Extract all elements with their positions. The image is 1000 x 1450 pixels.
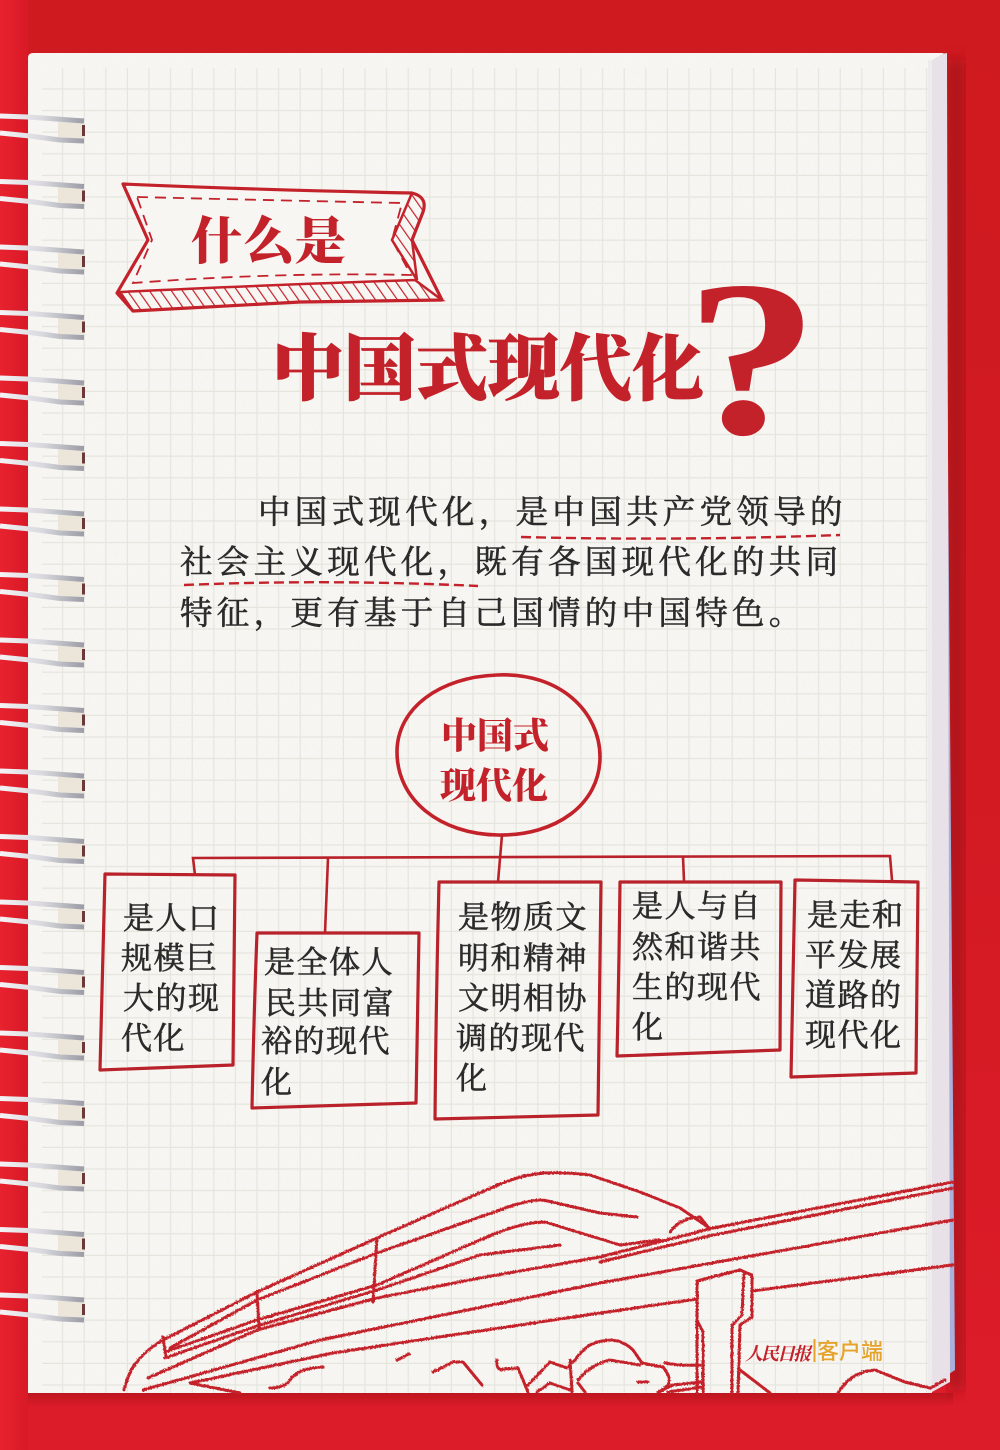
box 1: 大的现	[123, 981, 220, 1016]
box 1: 代化	[121, 1021, 186, 1056]
box 3: 调的现代	[456, 1021, 586, 1056]
box 4: 是人与自	[632, 889, 762, 924]
box 2: 化	[261, 1065, 294, 1100]
box 5: 现代化	[805, 1018, 902, 1053]
box 1: 规模巨	[121, 941, 218, 976]
box 3: 是物质文	[458, 900, 588, 935]
banner: 什么是	[117, 184, 442, 311]
box 2: 民共同富	[265, 986, 395, 1021]
box 5: 平发展	[805, 938, 902, 973]
box 2	[252, 933, 419, 1108]
box 4: 化	[632, 1010, 664, 1045]
box 5: 道路的	[805, 978, 902, 1013]
box 2: 是全体人	[264, 945, 394, 980]
box 4: 生的现代	[632, 970, 762, 1005]
box 4: 然和谐共	[632, 930, 762, 965]
illustration: high-speed train and bridge	[124, 1173, 953, 1393]
logo: 人民日报客户端: 客户端	[817, 1339, 883, 1364]
title: 中国式现代化: 中国式现代化	[272, 330, 704, 410]
box 4	[617, 882, 781, 1056]
banner text: 什么是	[191, 214, 347, 271]
logo: 人民日报客户端: 人民日报	[745, 1344, 813, 1364]
box 3: 化	[456, 1061, 488, 1096]
dashed emphasis underline	[184, 535, 840, 586]
mind map centre oval: 现代化	[440, 766, 548, 806]
connector lines	[193, 835, 892, 933]
box 3: 明和精神	[458, 941, 588, 976]
mind map centre oval	[397, 675, 600, 835]
intro paragraph	[180, 494, 847, 632]
intro paragraph: 特征，更有基于自己国情的中国特色。	[180, 595, 806, 632]
box 1: 是人口	[123, 901, 220, 936]
mind map centre oval: 中国式	[441, 716, 549, 756]
box 2: 裕的现代	[261, 1024, 391, 1059]
box 5	[791, 880, 918, 1077]
intro paragraph: 中国式现代化，是中国共产党领导的	[258, 494, 847, 531]
intro paragraph: 社会主义现代化，既有各国现代化的共同	[180, 544, 842, 581]
logo: 人民日报客户端	[745, 1339, 883, 1364]
box 3	[435, 882, 601, 1119]
binding rings	[0, 116, 85, 1320]
box 5: 是走和	[807, 898, 904, 933]
icon: question mark: ?	[685, 236, 819, 482]
box 1	[100, 874, 235, 1070]
box 3: 文明相协	[458, 981, 588, 1016]
